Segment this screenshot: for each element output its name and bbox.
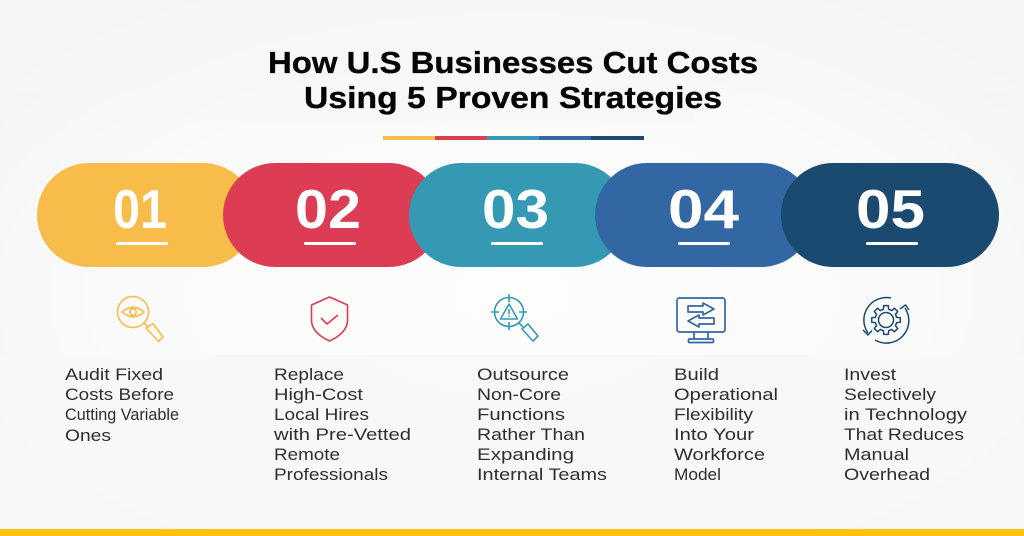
step 02 pill: [223, 163, 441, 267]
step 01 pill: 01: [113, 178, 167, 240]
step 03 pill: 03: [482, 178, 549, 240]
text: step 1: Audit Fixed: [65, 365, 163, 384]
text: step 2: [273, 365, 411, 484]
text: step 1: Costs Before: [65, 385, 174, 404]
text: step 2: Remote: [274, 445, 340, 464]
icon: magnifier with eye: [118, 296, 163, 342]
text: step 3: Outsource: [477, 365, 569, 384]
text: step 4: Into Your: [674, 425, 754, 444]
text: step 3: Rather Than: [477, 425, 585, 444]
text: step 2: Professionals: [274, 465, 388, 484]
text: step 5: Invest: [844, 365, 896, 384]
step 04 pill: [595, 163, 813, 267]
step 05 pill: [781, 163, 999, 267]
text: step 4: Workforce: [674, 445, 765, 464]
text: step 4: Operational: [674, 385, 778, 404]
bottom accent bar: [0, 529, 1024, 536]
text: step 5: in Technology: [844, 405, 968, 424]
text: step 3: Functions: [477, 405, 565, 424]
step 03 pill: [409, 163, 627, 267]
text: step 2: with Pre-Vetted: [273, 425, 411, 444]
text: step 2: Local Hires: [274, 405, 369, 424]
title: How U.S Businesses Cut Costs: [268, 45, 758, 80]
step 01 pill: [37, 163, 255, 267]
text: step 1: Cutting Variable: [65, 405, 179, 424]
text: step 5: That Reduces: [844, 425, 964, 444]
step 04 pill: 04: [668, 178, 739, 240]
text: step 3: Internal Teams: [477, 465, 607, 484]
text: step 2: Replace: [274, 365, 344, 384]
icon: gear with cycle arrows: [863, 298, 909, 343]
step 05 pill: 05: [856, 178, 925, 240]
text: step 1: Ones: [65, 426, 111, 445]
title underline colour bar: [383, 136, 644, 140]
text: step 3: Expanding: [477, 445, 574, 464]
text: step 4: Model: [674, 465, 721, 484]
text: step 3: [477, 365, 607, 484]
text: step 4: [674, 365, 778, 484]
title: Using 5 Proven Strategies: [304, 80, 722, 115]
text: step 5: [844, 365, 968, 484]
text: step 5: Overhead: [844, 465, 930, 484]
text: step 4: Build: [674, 365, 719, 384]
text: step 5: Selectively: [844, 385, 937, 404]
icon: target with warning and magnifier: [491, 294, 538, 341]
text: step 4: Flexibility: [674, 405, 754, 424]
title: [268, 45, 758, 115]
text: step 2: High-Cost: [274, 385, 363, 404]
text: step 1: [65, 365, 179, 445]
icon: monitor with swap arrows: [677, 298, 725, 342]
step 02 pill: 02: [295, 178, 361, 240]
text: step 3: Non-Core: [477, 385, 561, 404]
text: step 5: Manual: [844, 445, 909, 464]
icon: shield with check: [312, 297, 348, 341]
